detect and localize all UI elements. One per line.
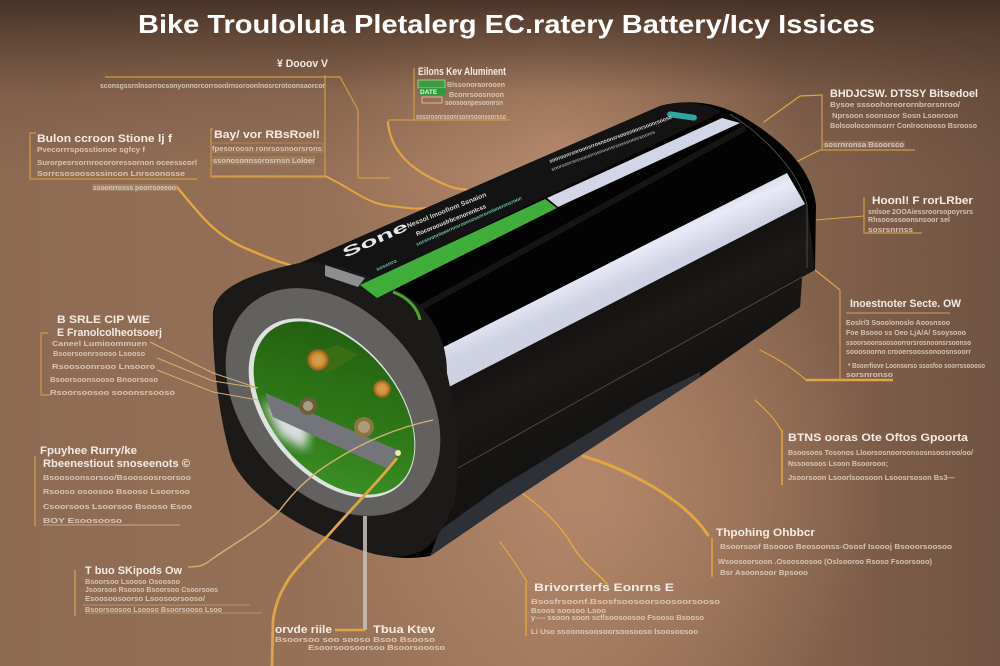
- battery: [182, 102, 816, 558]
- callout: bottom left: [75, 565, 262, 616]
- lower shell: [430, 203, 815, 556]
- bolt cylinder: [318, 345, 358, 375]
- callout: top right: [820, 88, 978, 150]
- callout: right upper: snlsoe 2OOAiessroorsopoyrsrs: [868, 207, 973, 216]
- callout: left middle: Rsoorsoosoo sooonsrsooso: [50, 388, 176, 397]
- callout: left upper: ssoonrrosss poorrsoeeon: [93, 183, 176, 192]
- silver edge: [325, 265, 365, 287]
- callout: bottom left: Esoosoosoorso Lsoosoorsooso/: [85, 594, 206, 603]
- black band highlight: [420, 128, 745, 308]
- callout: right middle: Inoestnoter Secte. OW: [850, 298, 962, 310]
- callout: left upper: [30, 133, 197, 192]
- battery label text: sooroonrsnroonsrrosnoonsrsooosoonrsoonrsooso: [549, 115, 673, 165]
- green stripe: [360, 199, 557, 298]
- callout: left lower: BOY Esoosooso: [43, 516, 123, 525]
- callout: right lower: Nssoosoos Lsoon Bsoorooo;: [788, 459, 888, 468]
- callout: centre left: [211, 129, 325, 177]
- callout: top centre-left: [100, 58, 390, 178]
- callout: left upper: Surorpesrsornrocororessornon oceesscorl: [37, 158, 197, 167]
- callout: bottom centre: Bsosfrsoonf.Bsosfsoosoorsoosoorsooso: [531, 597, 721, 606]
- front bezel: [213, 262, 459, 557]
- shell seam: [458, 277, 802, 468]
- callout: bottom centre: Brivorrterfs Eonrns E: [534, 582, 674, 594]
- callout: bottom middle: Bsoorsoo soo sooso Bsoo Bsooso: [275, 635, 436, 644]
- callout: left middle: Caneel Lumioommuen: [52, 339, 147, 348]
- battery label text: Sone: [340, 217, 411, 261]
- callout: top centre-left: sconsgssrnlnsorrocsonyonnorcorroonlrnsoroonlnosrcrotoonsaorcor: [100, 81, 325, 90]
- callout: bottom centre: Li Uso ssoonosoosoorsoosooso lsoosoosoo: [531, 627, 698, 636]
- callout: top right: Bysoe sssoohoreorornbrorsnroo/: [830, 100, 961, 109]
- callout: bottom centre: [526, 582, 721, 636]
- green compartment: [248, 318, 416, 498]
- callout: bottom left: Bsoorsoo Lsooso Osoosoo: [85, 577, 180, 586]
- callout: bottom left: Bsoorsoosoo Lsooso Bsoorsooso Lsoo: [85, 605, 222, 614]
- callout: bottom right: Thpohing Ohbbcr: [716, 527, 816, 539]
- callout: bottom left: Jsoorsoo Rsooso Bsoorsoo Csoorsoos: [85, 585, 218, 594]
- callout: right upper: Rhsoosssoonsnsoor sel: [868, 215, 950, 224]
- rim line: [730, 114, 807, 268]
- upper silver stripe: [547, 118, 740, 207]
- teal label: [667, 111, 697, 121]
- bluish bottom strip: [430, 372, 700, 556]
- callout: left lower: Rbeenestiout snoseenots ©: [43, 458, 190, 470]
- callout: top centre: Bconrsoosnoon: [449, 90, 504, 99]
- callout: top right: sosrnronsa Bsoorsco: [824, 140, 904, 149]
- callout: bottom middle: [275, 624, 445, 652]
- callout: bottom middle: orvde riile: [275, 624, 332, 636]
- battery label text: [340, 115, 673, 273]
- bolts: [307, 349, 329, 371]
- callout: left middle: Rsoosoonrsoo Lnsooro: [52, 362, 156, 371]
- callout: top centre: sossroonrsoonrsonrsoonsoorsso: [416, 112, 506, 121]
- callout: top centre-left: ¥ Dooov V: [277, 58, 329, 70]
- callout: top right: Bolsooloconnsorrr Conlrocnooso Bsrooso: [830, 121, 977, 130]
- callout: right middle: [806, 290, 985, 380]
- wires in front of battery: [150, 342, 433, 666]
- callout: right middle: Eoslr/3 Sooolonoslo Aoosnsoo: [846, 318, 950, 327]
- callout: left middle: [41, 314, 176, 397]
- callout: top centre: Blssonoraorooen: [447, 80, 505, 89]
- callout: left upper: Sorrcsosoosossincon Lnrsoonosse: [37, 169, 185, 178]
- callout: bottom middle: Tbua Ktev: [373, 624, 436, 636]
- callout: bottom right: Wsoosoorsoon .Osoosoosoo (Oslsooroo Rsoso Fsoorsooo): [718, 557, 932, 566]
- callout: left lower: Rsooso osoosoo Bsooso Lsoorsoo: [43, 487, 190, 496]
- battery label text: sooroonrsnroonsrrosnoonsrsooosoonrsoonrs: [551, 130, 656, 173]
- white highlight stripe: [428, 173, 805, 390]
- callout: bottom centre: Bsoos soosoo Lsoo: [531, 606, 606, 615]
- callout: right middle: Foe Bsooo ss Oeo LjA/A/ Ssoysooo: [846, 328, 966, 337]
- battery body: [213, 102, 816, 558]
- green glass arc: [393, 292, 420, 320]
- callout: centre left: fpesoroosn ronrsosnoorsrons: [212, 144, 322, 153]
- battery label text: Nessol lmoofiom Ssnaion: [406, 192, 488, 230]
- callout: right upper: Hoonl! F rorLRber: [872, 195, 974, 207]
- callout: left lower: Fpuyhee Rurry/ke: [40, 445, 137, 457]
- callout: right middle: sooosoorno crooersoossonoosnsoorr: [846, 347, 971, 356]
- callout: bottom right: Bsoorsoof Bsoooo Beosoonss-Ososf Isoooj Bsooorsoosoo: [720, 542, 952, 551]
- callout: right lower: [782, 430, 974, 485]
- upper label zone: [300, 103, 722, 286]
- callout: left lower: Bsoosoonsorsoo/Bsoosoosroorsoo: [43, 473, 191, 482]
- callout: right lower: BTNS ooras Ote Oftos Gpoorta: [788, 432, 969, 444]
- callout: left middle: B SRLE CIP WIE: [57, 314, 150, 326]
- callout: top centre: soosoonpesoonrsn: [445, 98, 503, 107]
- callout: right lower: Jsoorsoon Lsoorlsoosoon Lsoosrsoson Bs3—: [788, 473, 955, 482]
- callout: right upper: [864, 195, 974, 234]
- callout: right middle: sorsnronso: [846, 370, 893, 379]
- callout: right middle: ssoorsoonsoosoorrorsrosnoonsrsoonso: [846, 338, 971, 347]
- callout: left middle: Bsoorsoonsooso Bnoorsoso: [50, 375, 158, 384]
- battery label text: sossnro: [375, 258, 398, 273]
- callout: left lower: [35, 445, 192, 526]
- callout: top right: BHDJCSW. DTSSY Bitsedoel: [830, 88, 978, 100]
- light patch below divider: [262, 400, 310, 450]
- title: Bike Troulolula Pletalerg EC.ratery Battery/Icy Issices: [138, 9, 875, 39]
- callout: top centre: [388, 66, 510, 121]
- callout: bottom middle: Esoorsoosoorsoo Bsoorsoooso: [308, 643, 445, 652]
- callout: top right: Nprsoon soonsoor Sosn Lsooroon: [832, 111, 958, 120]
- green chip: DATE: [420, 89, 438, 96]
- callout: bottom right: Bsr Asoonsoor Bpsooo: [720, 568, 808, 577]
- callout: left lower: Csoorsoos Lsoorsoo Bsooso Esoo: [43, 502, 192, 511]
- callout: bottom centre: y---- ssoon soon scflsoosoosoo Fsooso Bsooso: [531, 613, 704, 622]
- connector wires behind battery: [177, 95, 864, 584]
- callout: right upper: sosrsnrnss: [868, 225, 913, 234]
- grey divider: [265, 393, 397, 470]
- grey ring: [182, 246, 484, 558]
- callout: left middle: Bsoorsoonrsooso Lsooso: [53, 349, 145, 358]
- callout: right lower: Bsoosoos Tosonos Lloorsosnooroonsosnsoosroo/oo/: [788, 448, 974, 457]
- callout: bottom left: T buo SKipods Ow: [85, 565, 182, 577]
- battery label text: Rocoroouslrbcenorenlcss: [416, 204, 488, 238]
- battery label text: sossnronniooernnsroonsossnronniooernnsroon: [415, 196, 523, 248]
- callout: centre left: Bay/ vor RBsRoel!: [214, 129, 320, 141]
- callout: bottom right: [712, 527, 952, 577]
- callout: top centre: Eilons Kev Aluminent: [418, 66, 506, 78]
- callout: left upper: Pvecorrrsposstionoe sgfcy f: [37, 145, 146, 154]
- callout: centre left: ssonosonnsorosrnsn Loloer: [213, 156, 315, 165]
- callout: left middle: E Franolcolheotsoerj: [57, 327, 162, 339]
- callout: left upper: Bulon ccroon Stione lj f: [37, 133, 172, 145]
